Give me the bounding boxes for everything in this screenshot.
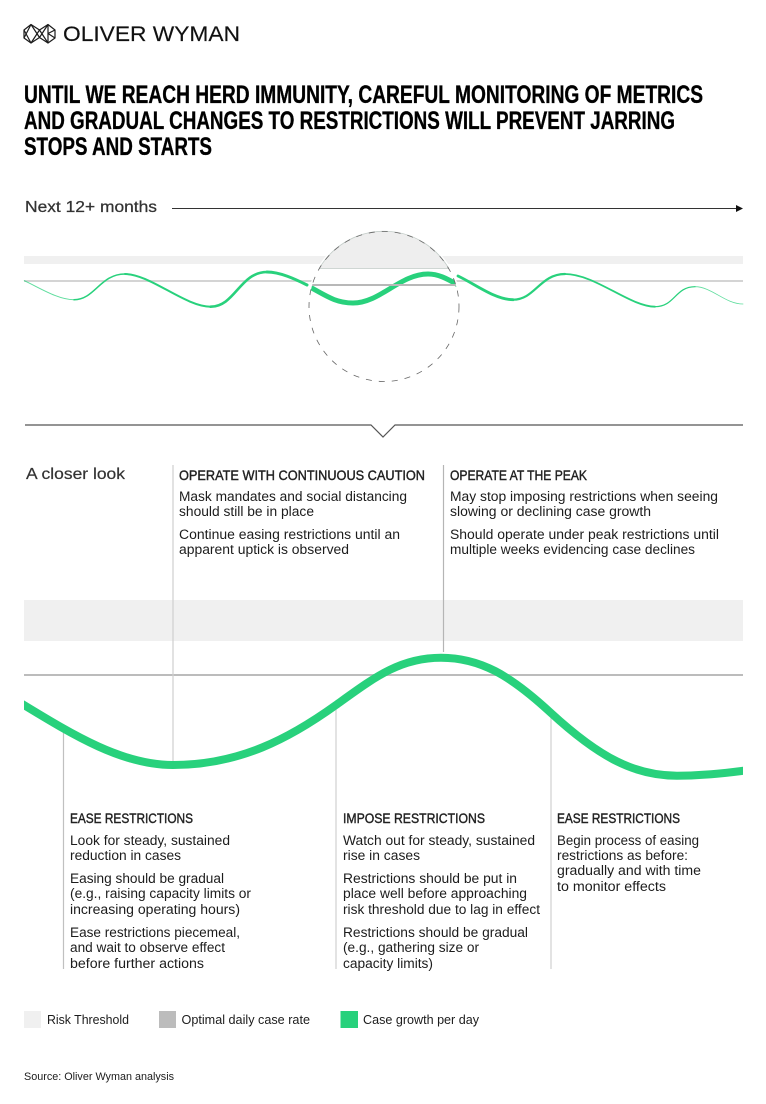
callout: ease restrictions (second): restrictions as before: <box>557 848 688 863</box>
leader lines <box>64 465 551 969</box>
callout: ease restrictions (first): (e.g., raising capacity limits or <box>70 886 252 901</box>
case growth curve: right <box>458 274 743 307</box>
callout: impose restrictions <box>343 811 540 971</box>
icon: logo mark <box>24 24 55 43</box>
callout: impose restrictions: IMPOSE RESTRICTIONS <box>343 811 485 826</box>
callout: operate with continuous caution: should still be in place <box>179 504 314 519</box>
case growth curve: left <box>24 272 307 307</box>
logo: Oliver Wyman <box>24 23 240 46</box>
callout: ease restrictions (first): Ease restrictions piecemeal, <box>70 925 240 940</box>
legend item: optimal daily case rate: Optimal daily case rate <box>182 1012 310 1027</box>
overview chart <box>24 225 743 384</box>
callout: ease restrictions (first): before further actions <box>70 956 204 971</box>
optimal case rate line <box>24 674 743 676</box>
callout: operate at the peak: May stop imposing restrictions when seeing <box>450 489 718 504</box>
case growth curve <box>14 658 753 776</box>
callout: ease restrictions (second): gradually and with time <box>557 863 701 878</box>
callout: operate at the peak: Should operate under peak restrictions until <box>450 527 719 542</box>
title <box>24 81 703 161</box>
optimal case rate line <box>24 280 743 282</box>
callout: impose restrictions: (e.g., gathering size or <box>343 940 480 955</box>
source note: Source: Oliver Wyman analysis <box>24 1071 174 1083</box>
title: STOPS AND STARTS <box>24 133 212 161</box>
timeline label and arrow: Next 12+ months <box>25 199 157 216</box>
callout: ease restrictions (first) <box>70 811 252 971</box>
legend <box>24 1011 479 1028</box>
callout: operate at the peak <box>450 468 719 557</box>
callout: ease restrictions (first): Look for steady, sustained <box>70 833 230 848</box>
legend item: case growth per day: Case growth per day <box>363 1012 479 1027</box>
callout: ease restrictions (first): EASE RESTRICTIONS <box>70 811 193 826</box>
callout: operate at the peak: multiple weeks evidencing case declines <box>450 542 695 557</box>
callout: ease restrictions (first): and wait to observe effect <box>70 940 225 955</box>
callout: impose restrictions: place well before approaching <box>343 886 527 901</box>
risk threshold band <box>24 600 743 641</box>
logo wordmark: OLIVER WYMAN <box>63 23 240 46</box>
callout: impose restrictions: rise in cases <box>343 848 420 863</box>
legend item: risk threshold: Risk Threshold <box>47 1012 129 1027</box>
risk threshold band <box>24 256 743 264</box>
timeline label and arrow <box>25 199 743 216</box>
callout: impose restrictions: capacity limits) <box>343 956 433 971</box>
callout: impose restrictions: Watch out for steady, sustained <box>343 833 535 848</box>
callout: ease restrictions (first): Easing should be gradual <box>70 871 224 886</box>
legend item: risk threshold <box>24 1011 129 1028</box>
callout: operate with continuous caution: apparent uptick is observed <box>179 542 349 557</box>
callout: operate with continuous caution: Mask mandates and social distancing <box>179 489 407 504</box>
callout: ease restrictions (second): Begin process of easing <box>557 833 699 848</box>
callout: ease restrictions (second) <box>557 811 701 894</box>
detail chart <box>14 465 753 969</box>
callout: impose restrictions: Restrictions should be put in <box>343 871 517 886</box>
callout: ease restrictions (second): EASE RESTRICTIONS <box>557 811 680 826</box>
callout: impose restrictions: risk threshold due to lag in effect <box>343 902 540 917</box>
callout: impose restrictions: Restrictions should be gradual <box>343 925 528 940</box>
callout: operate with continuous caution <box>179 468 425 557</box>
magnifier lens <box>308 230 460 382</box>
callout: operate at the peak: OPERATE AT THE PEAK <box>450 468 587 483</box>
callout: ease restrictions (first): reduction in cases <box>70 848 181 863</box>
callout: ease restrictions (second): to monitor effects <box>557 879 666 894</box>
callout: operate with continuous caution: Continue easing restrictions until an <box>179 527 400 542</box>
closer look divider with pointer <box>25 425 743 437</box>
callout: operate with continuous caution: OPERATE WITH CONTINUOUS CAUTION <box>179 468 425 483</box>
callout: ease restrictions (first): increasing operating hours) <box>70 902 240 917</box>
callout: operate at the peak: slowing or declining case growth <box>450 504 651 519</box>
heading: a closer look: A closer look <box>26 466 126 483</box>
